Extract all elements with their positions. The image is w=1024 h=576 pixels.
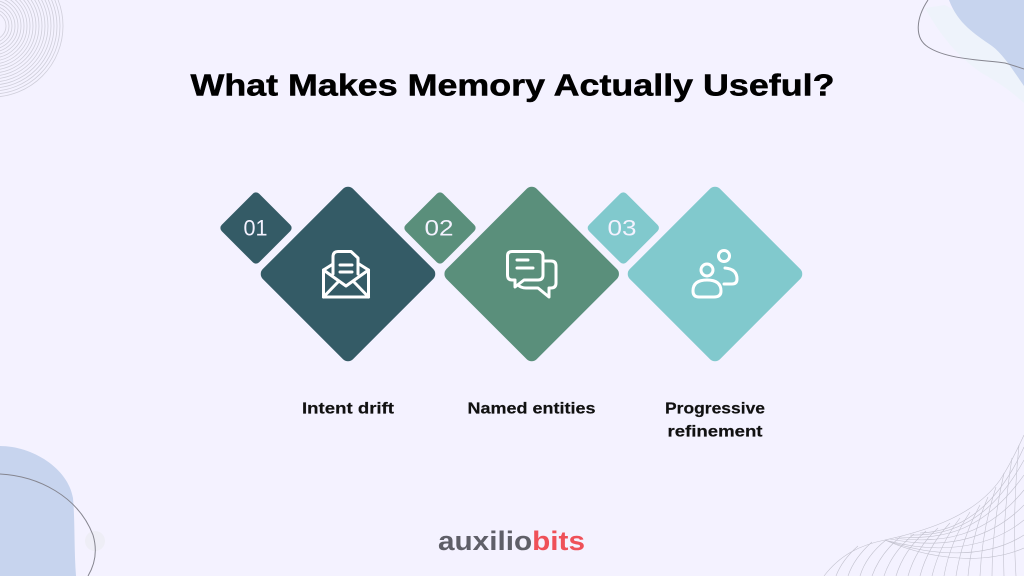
large diamond	[442, 184, 622, 364]
label: Progressive refinement: Progressive	[665, 400, 765, 418]
decoration: bottom-left blob and line	[0, 446, 105, 576]
label: Intent drift: Intent drift	[302, 400, 395, 418]
step 01: intent drift	[219, 184, 438, 418]
decoration: top-left concentric arcs	[0, 0, 63, 97]
small diamond with number 01: 01	[244, 216, 268, 240]
title: What Makes Memory Actually Useful?	[190, 68, 834, 102]
decoration: top-right blob and line	[918, 0, 1024, 103]
logo: auxiliobits: auxilio bits	[438, 526, 585, 556]
decoration: bottom-right line mesh	[824, 435, 1024, 576]
label: Named entities: Named entities	[468, 400, 596, 418]
small diamond with number 01	[219, 191, 293, 265]
step 03: progressive refinement: refinement	[668, 424, 763, 440]
large diamond	[625, 184, 805, 364]
icon: open envelope with letter	[324, 252, 368, 297]
small diamond with number 03	[586, 191, 661, 265]
icon: two people	[693, 250, 737, 297]
small diamond with number 02: 02	[424, 216, 454, 240]
large diamond	[258, 184, 438, 364]
small diamond with number 02	[403, 191, 477, 265]
icon: chat bubbles	[508, 252, 556, 297]
step 02: named entities	[403, 184, 622, 418]
small diamond with number 03: 03	[608, 216, 636, 240]
step 03: progressive refinement	[586, 184, 805, 441]
